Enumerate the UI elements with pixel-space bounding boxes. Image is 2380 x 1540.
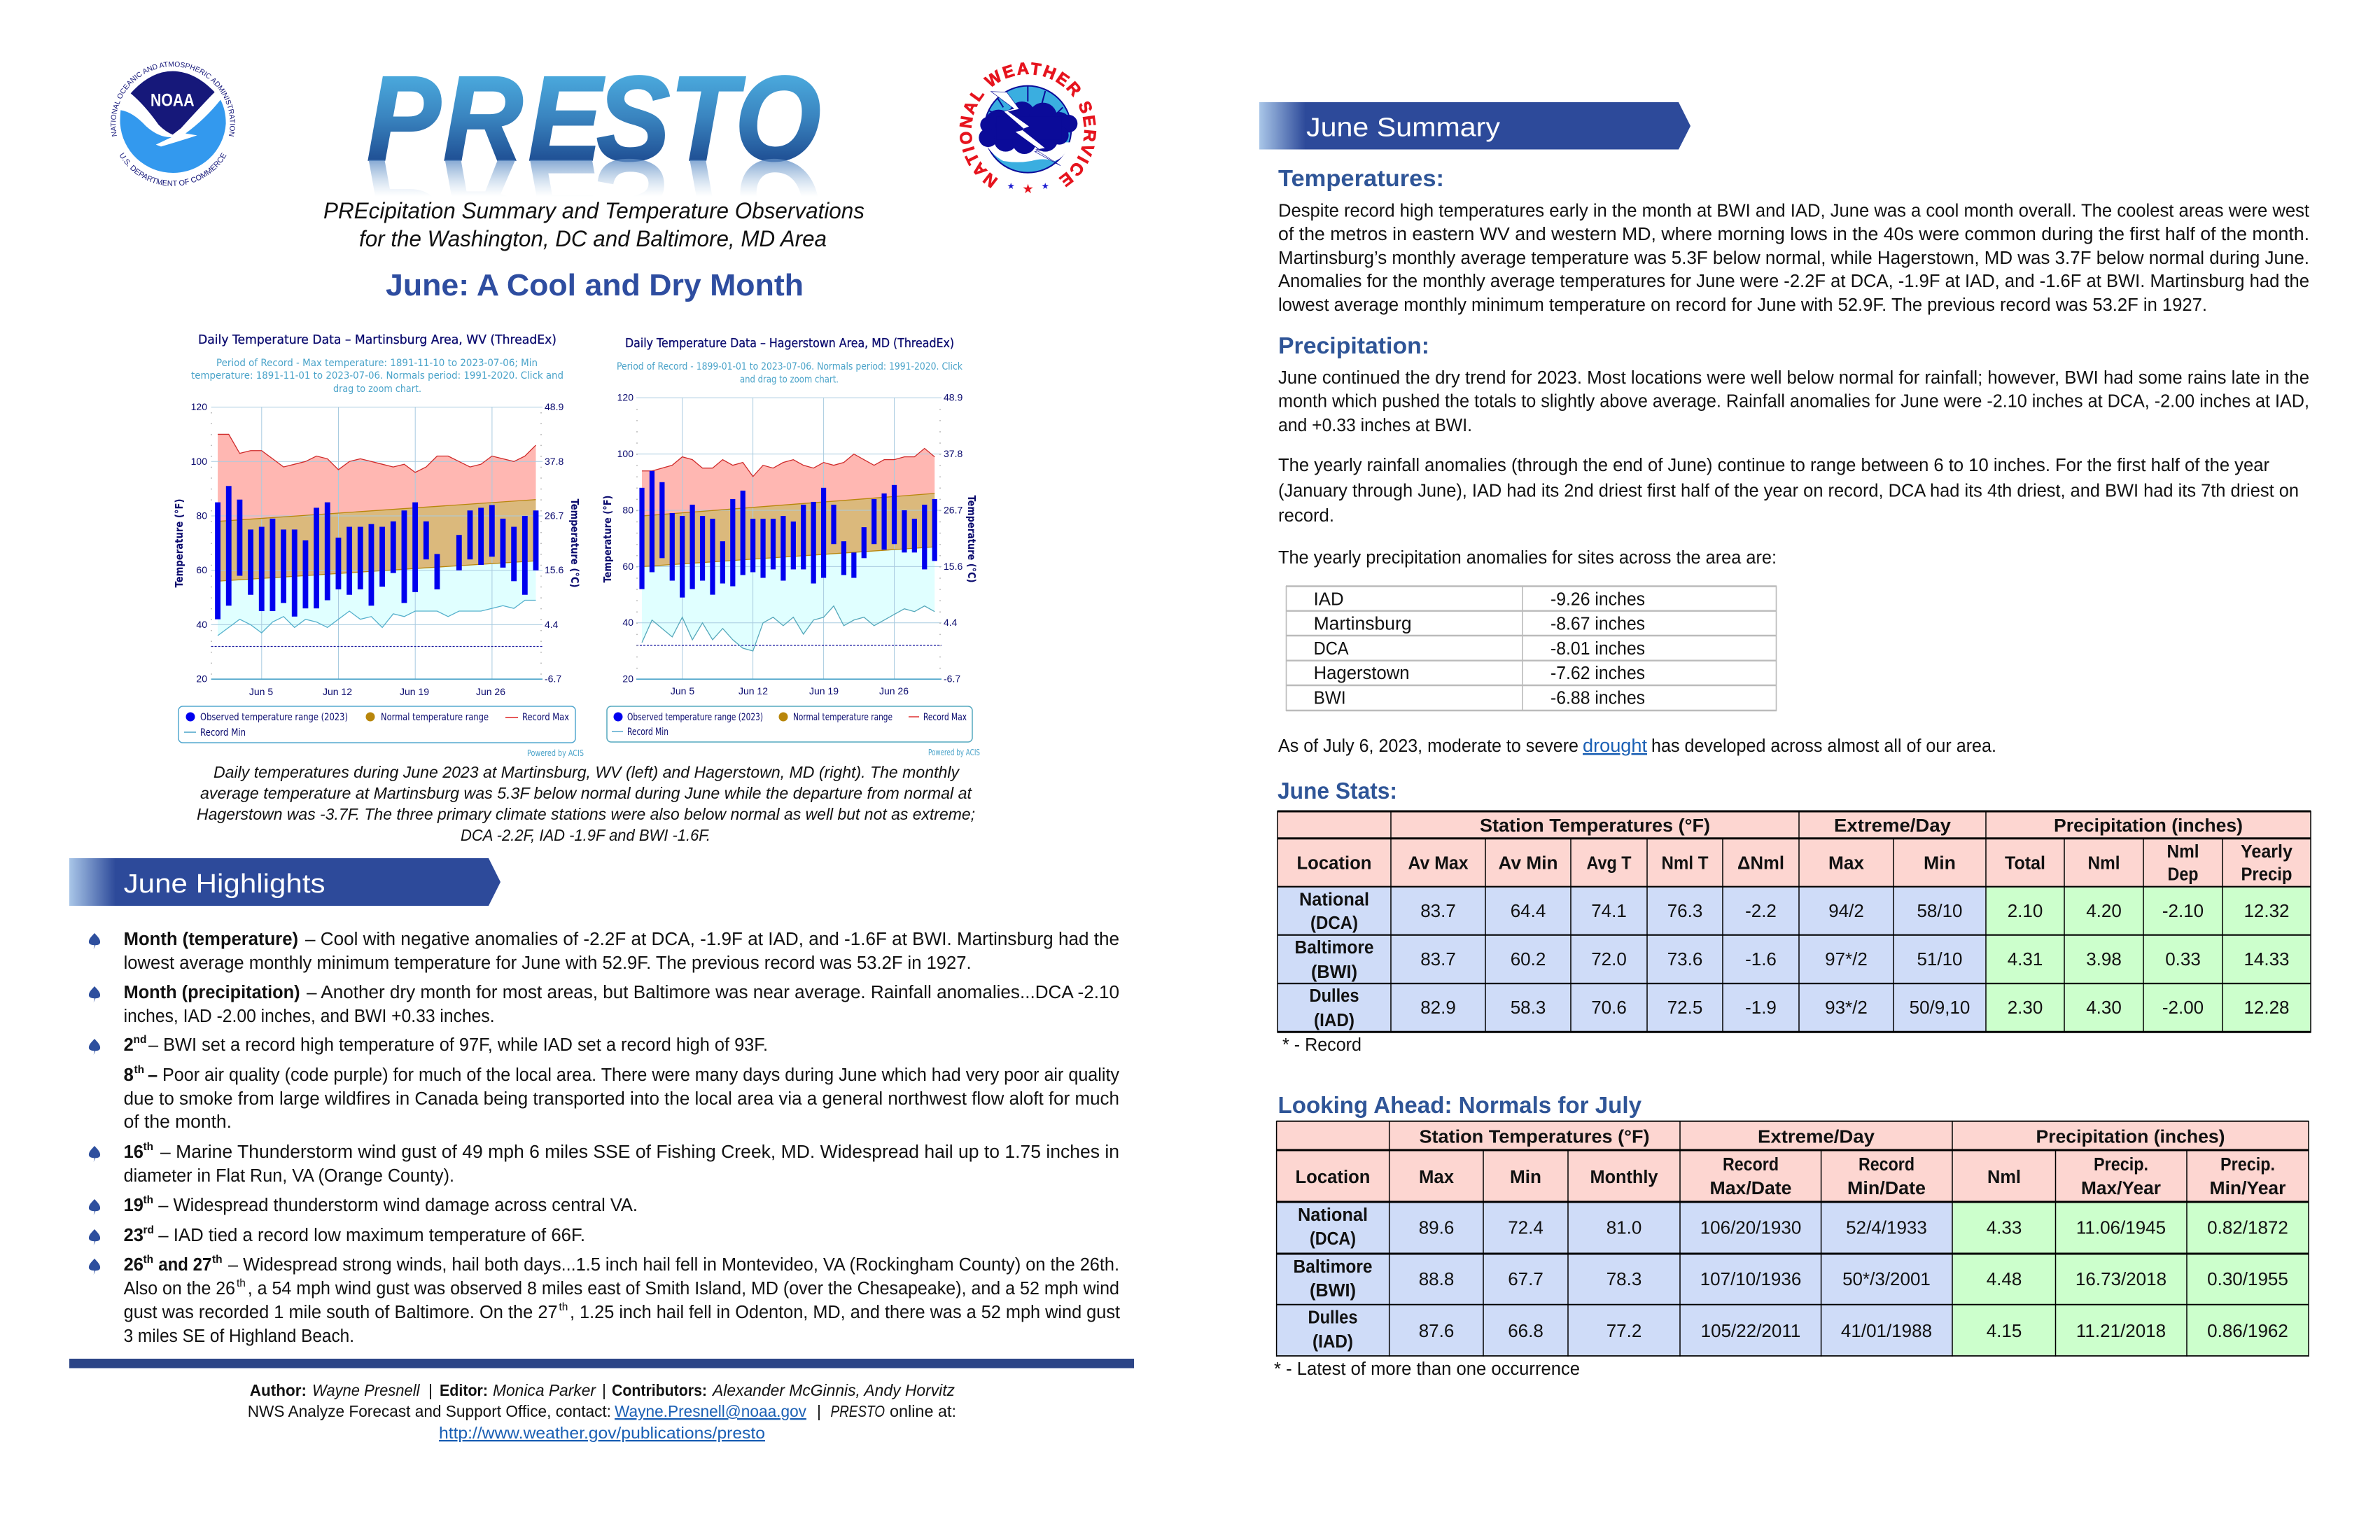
table: normals for July: National: [1298, 1205, 1368, 1225]
icon: bullet leaf: [89, 1229, 100, 1245]
highlight: June 19th: 19: [124, 1196, 144, 1215]
heading banner: June Summary: June Summary: [1306, 113, 1500, 143]
table: June stats: (BWI): [1311, 962, 1357, 982]
table: June stats: 64.4: [1511, 900, 1546, 921]
highlight: June 23rd: 23: [124, 1226, 144, 1245]
text block: temperatures summary: of the metros in eastern WV and western MD, where morning lows in the 40s were common during the first half of the month.: [1278, 225, 2309, 244]
table: June stats: 50/9,10: [1910, 997, 1970, 1018]
text block: precipitation summary: June continued the dry trend for 2023. Most locations were well below normal for rainfall; however, BWI had some rains late in the: [1278, 368, 2309, 388]
caption for temperature charts: [197, 763, 975, 844]
chart: Hagerstown daily temperature: Powered by ACIS: [928, 748, 980, 757]
table: June stats: Total: [2005, 854, 2045, 874]
table: June stats: 94/2: [1828, 900, 1864, 921]
table: yearly precipitation anomalies: Hagerstown: [1314, 664, 1410, 683]
table: June stats: -2.2: [1745, 900, 1777, 921]
icon: National Weather Service logo: ★: [1007, 181, 1015, 191]
icon: bullet leaf: [89, 986, 100, 1002]
text block: drought note: has developed across almost all of our area.: [1651, 736, 1996, 756]
highlight: June 23rd: – IAD tied a record low maximum temperature of 66F.: [158, 1226, 585, 1245]
table: June stats: (IAD): [1314, 1011, 1354, 1030]
table: normals for July: Precipitation (inches): [2036, 1128, 2225, 1147]
table note: latest occurrence: * - Latest of more than one occurrence: [1274, 1359, 1580, 1379]
chart: Hagerstown daily temperature: 26.7: [944, 504, 962, 515]
table: normals for July: Max: [1419, 1168, 1454, 1187]
chart: Hagerstown daily temperature: Normal temperature range: [793, 712, 892, 723]
chart: Martinsburg daily temperature: Powered by ACIS: [527, 748, 584, 758]
table: normals for July: 52/4/1933: [1846, 1217, 1927, 1238]
heading: Looking Ahead: Looking Ahead: Normals for July: [1278, 1092, 1642, 1118]
table: normals for July: Min/Year: [2209, 1179, 2286, 1198]
chart: Martinsburg daily temperature: -6.7: [545, 673, 561, 685]
footer rule: [69, 1359, 1134, 1368]
highlight: June 16th: 16: [124, 1142, 144, 1162]
table: June stats: 12.32: [2244, 900, 2290, 921]
table: yearly precipitation anomalies: Martinsburg: [1314, 615, 1412, 634]
table: normals for July: (DCA): [1310, 1229, 1356, 1249]
table: normals for July: Precip.: [2094, 1155, 2148, 1175]
table: June stats: National: [1299, 890, 1369, 910]
chart: Hagerstown daily temperature: 48.9: [944, 392, 962, 403]
table: normals for July: 0.30/1955: [2207, 1268, 2288, 1289]
chart: Hagerstown daily temperature: 100: [617, 448, 634, 459]
table: June stats: Avg T: [1586, 854, 1632, 874]
logo: PRESTO wordmark: PRESTO: [367, 134, 821, 269]
chart: Martinsburg daily temperature: Jun 19: [400, 686, 429, 697]
text block: precipitation summary: record.: [1278, 506, 1334, 526]
table: June stats: 83.7: [1420, 900, 1456, 921]
heading: June Stats: June Stats:: [1278, 778, 1397, 804]
subtitle: for the Washington, DC and Baltimore, MD Area: [359, 226, 827, 251]
text block: temperatures summary: [1278, 202, 2309, 315]
text block: precipitation summary: month which pushed the totals to slightly above average. Rainfall anomalies for June were -2.10 inches at DCA, -2.00 inches at IAD,: [1278, 392, 2309, 412]
chart: Hagerstown daily temperature: 60: [622, 561, 634, 572]
table: normals for July: (IAD): [1312, 1332, 1353, 1352]
highlight: June 26th and 27th: 3 miles SE of Highland Beach.: [124, 1326, 354, 1346]
table: normals for July: 107/10/1936: [1700, 1268, 1801, 1289]
table: normals for July: 77.2: [1606, 1320, 1642, 1341]
table: June stats: Baltimore: [1295, 938, 1373, 958]
chart: Martinsburg daily temperature: 80: [196, 510, 207, 521]
chart: Martinsburg daily temperature: 15.6: [545, 564, 564, 575]
text block: temperatures summary: Anomalies for the monthly average temperatures for June were -2.2F at DCA, -1.9F at IAD, and -1.6F at BWI. Martinsburg had the: [1278, 272, 2309, 291]
icon: bullet leaf: [89, 1199, 100, 1215]
table: June stats: 4.31: [2008, 948, 2043, 969]
chart: Hagerstown daily temperature: 15.6: [944, 561, 962, 572]
caption for temperature charts: average temperature at Martinsburg was 5.3F below normal during June while the departure from normal at: [200, 784, 973, 802]
icon: National Weather Service logo: ★: [1022, 181, 1034, 196]
footer credits: PRESTO: [830, 1402, 885, 1420]
table: June stats: 74.1: [1591, 900, 1627, 921]
table: yearly precipitation anomalies: BWI: [1314, 689, 1346, 708]
icon: NOAA logo: NATIONAL OCEANIC AND ATMOSPHERIC ADMINISTRATION: [111, 62, 235, 136]
table note: record: * - Record: [1282, 1035, 1362, 1055]
table: normals for July: Extreme/Day: [1758, 1128, 1875, 1147]
table: June stats: Precipitation (inches): [2054, 816, 2243, 836]
highlight: month precipitation: Month (precipitation): [124, 983, 300, 1002]
table: yearly precipitation anomalies: -8.01 inches: [1550, 639, 1645, 659]
table: normals for July: 4.48: [1987, 1268, 2022, 1289]
highlight: June 26th and 27th: Also on the 26: [124, 1279, 235, 1298]
logo: PRESTO wordmark: PRESTO: [367, 51, 821, 186]
table: normals for July: 66.8: [1508, 1320, 1544, 1341]
icon: NOAA logo: NOAA: [150, 92, 195, 111]
table: June stats: 58.3: [1511, 997, 1546, 1018]
chart: Martinsburg daily temperature: 120: [191, 401, 207, 412]
chart: Hagerstown daily temperature: 37.8: [944, 448, 962, 459]
table: normals for July: Record: [1858, 1155, 1914, 1175]
chart: Martinsburg daily temperature: Record Max: [522, 712, 569, 723]
table: normals for July: Min/Date: [1847, 1179, 1926, 1198]
highlight: June 26th and 27th: and 27: [158, 1255, 211, 1275]
table: June stats: 93*/2: [1825, 997, 1868, 1018]
highlight: June 26th and 27th: gust was recorded 1 mile south of Baltimore. On the 27: [124, 1303, 558, 1322]
highlight: June 26th and 27th: 26: [124, 1255, 144, 1275]
table: June stats: 12.28: [2244, 997, 2290, 1018]
table: normals for July: 11.21/2018: [2076, 1320, 2166, 1341]
table: yearly precipitation anomalies: -6.88 inches: [1550, 689, 1645, 708]
table: June stats: Max: [1828, 854, 1864, 874]
footer credits: Alexander McGinnis, Andy Horvitz: [711, 1381, 955, 1399]
table: normals for July: Baltimore: [1294, 1257, 1372, 1277]
table: June stats: 58/10: [1917, 900, 1963, 921]
chart: Martinsburg daily temperature: Jun 26: [476, 686, 505, 697]
table: yearly precipitation anomalies: -8.67 inches: [1550, 615, 1645, 634]
chart: Martinsburg daily temperature: 37.8: [545, 456, 564, 467]
table: yearly precipitation anomalies: DCA: [1314, 639, 1349, 659]
table: normals for July: Record: [1723, 1155, 1779, 1175]
chart: Martinsburg daily temperature: Jun 12: [323, 686, 352, 697]
highlight: month temperature: [124, 930, 1119, 973]
highlight: June 8th: due to smoke from large wildfires in Canada being transported into the local area via a general northwest flow aloft for much: [124, 1089, 1119, 1109]
chart: Martinsburg daily temperature: Period of Record - Max temperature: 1891-11-10 to 2023-07-06; Min: [216, 358, 538, 369]
table: June stats: Dep: [2167, 865, 2198, 885]
chart: Martinsburg daily temperature: 40: [196, 619, 207, 630]
highlight: June 26th and 27th: th: [212, 1254, 223, 1266]
chart: Hagerstown daily temperature: 20: [622, 673, 634, 685]
table: yearly precipitation anomalies: -7.62 inches: [1550, 664, 1645, 683]
table: June stats: Yearly: [2241, 842, 2293, 862]
title: June: A Cool and Dry Month: [386, 268, 804, 302]
table: normals for July: 0.86/1962: [2207, 1320, 2288, 1341]
footer credits: Author:: [250, 1381, 307, 1399]
table: normals for July: 78.3: [1606, 1268, 1642, 1289]
table: June stats: 73.6: [1667, 948, 1702, 969]
chart: Martinsburg daily temperature: Normal temperature range: [381, 712, 489, 723]
table: June stats: Dulles: [1309, 986, 1359, 1006]
table: June stats: Nml: [2167, 842, 2199, 862]
text block: drought note: [1278, 736, 1996, 756]
chart: Hagerstown daily temperature: Temperature (°F): [601, 496, 614, 582]
heading banner: June Highlights: [69, 858, 500, 906]
chart: Martinsburg daily temperature: 60: [196, 564, 207, 575]
highlight: June 26th and 27th: th: [237, 1278, 246, 1289]
table: June stats: 76.3: [1667, 900, 1702, 921]
highlight: June 8th: 8: [124, 1065, 134, 1085]
table: June stats: 97*/2: [1825, 948, 1868, 969]
subtitle: PREcipitation Summary and Temperature Observations: [323, 198, 864, 223]
caption for temperature charts: Hagerstown was -3.7F. The three primary climate stations were also below normal as well but not as extreme;: [197, 805, 975, 823]
chart: Martinsburg daily temperature: Temperature (°F): [173, 498, 186, 588]
highlight: June 16th: diameter in Flat Run, VA (Orange County).: [124, 1166, 454, 1186]
table: normals for July: 4.15: [1987, 1320, 2022, 1341]
highlight: June 26th and 27th: [124, 1254, 1120, 1346]
table: June stats: (DCA): [1310, 913, 1358, 933]
footer credits: [248, 1381, 956, 1442]
chart: Hagerstown daily temperature: Jun 12: [738, 685, 768, 696]
text block: precipitation summary: (January through June), IAD had its 2nd driest first half of the year on record, DCA had its 4th driest, and BWI had its 7th driest on: [1278, 482, 2299, 501]
highlight: June 26th and 27th: , a 54 mph wind gust was observed 8 miles east of Smith Island, MD (over the Chesapeake), and a 52 mph wind: [248, 1279, 1119, 1298]
chart: Hagerstown daily temperature: Observed temperature range (2023): [627, 712, 763, 723]
table: normals for July: 87.6: [1419, 1320, 1454, 1341]
table: June stats: 0.33: [2165, 948, 2201, 969]
heading: Precipitation: Precipitation:: [1278, 332, 1429, 358]
table: June stats: 51/10: [1917, 948, 1963, 969]
chart: Hagerstown daily temperature: [601, 336, 980, 757]
table: June stats: Nml: [2087, 854, 2120, 874]
table: June stats: Location: [1296, 854, 1372, 874]
table: June stats: 60.2: [1511, 948, 1546, 969]
table: June stats: Precip: [2241, 865, 2292, 885]
highlight: month temperature: – Cool with negative anomalies of -2.2F at DCA, -1.9F at IAD, and -1.6F at BWI. Martinsburg had the: [305, 930, 1119, 949]
table: normals for July: 105/22/2011: [1701, 1320, 1800, 1341]
table: June stats: -2.10: [2162, 900, 2204, 921]
table: normals for July: Location: [1295, 1168, 1371, 1187]
highlight: June 26th and 27th: , 1.25 inch hail fell in Odenton, MD, and there was a 52 mph wind gust: [570, 1303, 1120, 1322]
table: normals for July: Precip.: [2220, 1155, 2275, 1175]
icon: NOAA logo: U.S. DEPARTMENT OF COMMERCE: [120, 153, 227, 186]
highlight: June 16th: – Marine Thunderstorm wind gust of 49 mph 6 miles SSE of Fishing Creek, MD. Widespread hail up to 1.75 inches in: [160, 1142, 1119, 1162]
text block: precipitation summary: and +0.33 inches at BWI.: [1278, 416, 1472, 435]
chart: Martinsburg daily temperature: temperature: 1891-11-01 to 2023-07-06. Normals period: 1991-2020. Click and: [191, 370, 564, 382]
table: normals for July: Min: [1510, 1168, 1541, 1187]
footer credits: Editor:: [440, 1381, 488, 1399]
table: June stats: 4.20: [2086, 900, 2122, 921]
subtitle: [323, 198, 864, 251]
table: normals for July: 106/20/1930: [1700, 1217, 1801, 1238]
text block: precipitation summary: The yearly precipitation anomalies for sites across the area are:: [1278, 548, 1777, 568]
highlight: month precipitation: inches, IAD -2.00 inches, and BWI +0.33 inches.: [124, 1007, 495, 1026]
footer credits: Wayne.Presnell@noaa.gov: [615, 1402, 806, 1420]
highlight: June 2nd: nd: [133, 1034, 146, 1046]
icon: bullet leaf: [89, 1259, 100, 1275]
chart: Hagerstown daily temperature: Jun 5: [671, 685, 694, 696]
table: normals for July: Max/Date: [1709, 1179, 1792, 1198]
chart: Martinsburg daily temperature: 4.4: [545, 619, 559, 630]
icon: NOAA logo: [111, 62, 235, 186]
chart: Hagerstown daily temperature: -6.7: [944, 673, 960, 685]
chart: Martinsburg daily temperature: Jun 5: [249, 686, 273, 697]
heading banner: June Summary: [1259, 102, 1690, 150]
chart: Martinsburg daily temperature: 20: [196, 673, 207, 685]
table: June stats: -1.6: [1745, 948, 1777, 969]
table: June stats: Min: [1924, 854, 1956, 874]
table: normals for July: 67.7: [1508, 1268, 1544, 1289]
table: normals for July: [1277, 1121, 2309, 1357]
heading banner: June Highlights: June Highlights: [124, 869, 326, 899]
table: June stats: 82.9: [1420, 997, 1456, 1018]
text block: temperatures summary: Despite record high temperatures early in the month at BWI and IAD, June was a cool month overall. The coolest areas were west: [1278, 202, 2309, 221]
footer credits: |: [428, 1381, 433, 1399]
text block: temperatures summary: lowest average monthly minimum temperature on record for June with 52.9F. The previous record was 53.2F in 1927.: [1278, 295, 2207, 315]
table: June stats: 4.30: [2086, 997, 2122, 1018]
table: June stats: 2.30: [2008, 997, 2043, 1018]
table: normals for July: 16.73/2018: [2076, 1268, 2166, 1289]
footer credits: Wayne Presnell: [312, 1381, 420, 1399]
footer credits: |: [817, 1402, 821, 1420]
highlights list: [89, 930, 1120, 1346]
text block: drought note: As of July 6, 2023, moderate to severe: [1278, 736, 1578, 756]
caption for temperature charts: Daily temperatures during June 2023 at Martinsburg, WV (left) and Hagerstown, MD (right). The monthly: [214, 763, 960, 781]
table: yearly precipitation anomalies: [1286, 586, 1777, 711]
highlight: June 8th: th: [134, 1064, 144, 1076]
table: June stats: 2.10: [2008, 900, 2043, 921]
highlight: June 23rd: rd: [143, 1224, 154, 1236]
icon: bullet leaf: [89, 1039, 100, 1055]
table: June stats: Av Max: [1408, 854, 1469, 874]
highlight: June 26th and 27th: th: [143, 1254, 153, 1266]
table: normals for July: 41/01/1988: [1841, 1320, 1932, 1341]
table: June stats: -1.9: [1745, 997, 1777, 1018]
footer credits: NWS Analyze Forecast and Support Office, contact:: [248, 1402, 611, 1420]
highlight: June 19th: th: [143, 1194, 153, 1206]
table: June stats: -2.00: [2162, 997, 2204, 1018]
table: June stats: Nml T: [1662, 854, 1709, 874]
table: June stats: 70.6: [1591, 997, 1627, 1018]
table: normals for July: 81.0: [1606, 1217, 1642, 1238]
text block: temperatures summary: Martinsburg’s monthly average temperature was 5.3F below normal, while Hagerstown, MD was 3.7F below normal during June.: [1278, 248, 2309, 268]
highlight: June 26th and 27th: – Widespread strong winds, hail both days...1.5 inch hail fell in Montevideo, VA (Rockingham County) on the 26th.: [228, 1255, 1119, 1275]
text block: precipitation summary: [1278, 368, 2309, 568]
table: June stats: 3.98: [2086, 948, 2122, 969]
table: normals for July: (BWI): [1310, 1281, 1356, 1301]
footer credits: online at:: [890, 1402, 956, 1420]
chart: Hagerstown daily temperature: Record Max: [923, 712, 967, 723]
icon: bullet leaf: [89, 933, 100, 949]
highlight: month precipitation: [124, 983, 1119, 1026]
table: normals for July: Nml: [1987, 1168, 2021, 1187]
highlight: June 19th: – Widespread thunderstorm wind damage across central VA.: [158, 1196, 638, 1215]
chart: Martinsburg daily temperature: 100: [191, 456, 207, 467]
caption for temperature charts: DCA -2.2F, IAD -1.9F and BWI -1.6F.: [461, 826, 710, 844]
heading: Temperatures: Temperatures:: [1278, 165, 1444, 191]
highlight: June 8th: Poor air quality (code purple) for much of the local area. There were many days during June which had very poor air quality: [162, 1065, 1119, 1085]
table: yearly precipitation anomalies: -9.26 inches: [1550, 589, 1645, 609]
logo: PRESTO wordmark: [367, 51, 821, 269]
chart: Martinsburg daily temperature: Daily Temperature Data – Martinsburg Area, WV (ThreadEx): [198, 332, 556, 347]
table: June stats: Av Min: [1498, 854, 1558, 874]
table: June stats: [1278, 811, 2311, 1033]
table: normals for July: 89.6: [1419, 1217, 1454, 1238]
chart: Hagerstown daily temperature: Jun 19: [809, 685, 839, 696]
table: June stats: Station Temperatures (°F): [1480, 816, 1710, 836]
table: normals for July: Dulles: [1308, 1308, 1358, 1328]
icon: bullet leaf: [89, 1146, 100, 1162]
table: normals for July: 50*/3/2001: [1842, 1268, 1931, 1289]
table: June stats: Extreme/Day: [1834, 816, 1952, 836]
chart: Martinsburg daily temperature: 26.7: [545, 510, 564, 521]
table: June stats: 83.7: [1420, 948, 1456, 969]
highlight: month temperature: lowest average monthly minimum temperature for June with 52.9F. The previous record was 53.2F in 1927.: [124, 953, 972, 973]
chart: Martinsburg daily temperature: Observed temperature range (2023): [200, 712, 348, 723]
icon: National Weather Service logo: ★: [1042, 181, 1049, 191]
chart: Hagerstown daily temperature: Temperature (°C): [965, 496, 978, 582]
highlight: June 8th: [124, 1064, 1119, 1132]
chart: Hagerstown daily temperature: Record Min: [627, 727, 668, 738]
highlight: month precipitation: – Another dry month for most areas, but Baltimore was near average. Rainfall anomalies...DCA -2.10: [307, 983, 1119, 1002]
footer credits: |: [602, 1381, 606, 1399]
table: June stats: 72.0: [1591, 948, 1627, 969]
text block: precipitation summary: The yearly rainfall anomalies (through the end of June) continue to range between 6 to 10 inches. For the first half of the year: [1278, 456, 2269, 475]
chart: Hagerstown daily temperature: and drag to zoom chart.: [740, 374, 839, 385]
chart: Martinsburg daily temperature: Temperature (°C): [568, 498, 581, 588]
chart: Hagerstown daily temperature: 4.4: [944, 617, 958, 628]
chart: Martinsburg daily temperature: Record Min: [200, 727, 246, 738]
icon: National Weather Service logo: NATIONAL WEATHER SERVICE: [959, 62, 1096, 188]
table: normals for July: Station Temperatures (°F): [1420, 1128, 1649, 1147]
table: normals for July: Max/Year: [2081, 1179, 2161, 1198]
table: normals for July: Monthly: [1590, 1168, 1658, 1187]
highlight: June 16th: [124, 1141, 1119, 1186]
chart: Hagerstown daily temperature: 120: [617, 392, 634, 403]
table: normals for July: 72.4: [1508, 1217, 1544, 1238]
chart: Hagerstown daily temperature: Period of Record - 1899-01-01 to 2023-07-06. Normals period: 1991-2020. Click: [617, 361, 963, 372]
highlight: month temperature: Month (temperature): [124, 930, 298, 949]
chart: Hagerstown daily temperature: Jun 26: [879, 685, 909, 696]
highlight: June 8th: –: [148, 1065, 158, 1085]
footer credits: Contributors:: [612, 1381, 707, 1399]
table: normals for July: 88.8: [1419, 1268, 1454, 1289]
table: June stats: ΔNml: [1737, 854, 1784, 874]
table: normals for July: 0.82/1872: [2207, 1217, 2288, 1238]
footer credits: http://www.weather.gov/publications/presto: [439, 1424, 765, 1442]
chart: Hagerstown daily temperature: 80: [622, 504, 634, 515]
chart: Martinsburg daily temperature: 48.9: [545, 401, 564, 412]
table: June stats: 72.5: [1667, 997, 1702, 1018]
table: normals for July: 4.33: [1987, 1217, 2022, 1238]
footer credits: Monica Parker: [493, 1381, 596, 1399]
text block: drought note: drought: [1583, 736, 1647, 756]
chart: Martinsburg daily temperature: drag to zoom chart.: [333, 384, 421, 395]
chart: Hagerstown daily temperature: Daily Temperature Data – Hagerstown Area, MD (ThreadEx): [625, 336, 954, 351]
highlight: June 8th: of the month.: [124, 1112, 232, 1132]
highlight: June 2nd: – BWI set a record high temperature of 97F, while IAD set a record high of 93F.: [148, 1035, 768, 1055]
chart: Martinsburg daily temperature: [173, 332, 584, 758]
highlight: June 26th and 27th: th: [559, 1301, 568, 1313]
chart: Hagerstown daily temperature: 40: [622, 617, 634, 628]
table: June stats: 14.33: [2244, 948, 2290, 969]
table: yearly precipitation anomalies: IAD: [1314, 589, 1344, 609]
highlight: June 2nd: 2: [124, 1035, 134, 1055]
table: normals for July: 11.06/1945: [2076, 1217, 2166, 1238]
highlight: June 16th: th: [143, 1141, 153, 1153]
